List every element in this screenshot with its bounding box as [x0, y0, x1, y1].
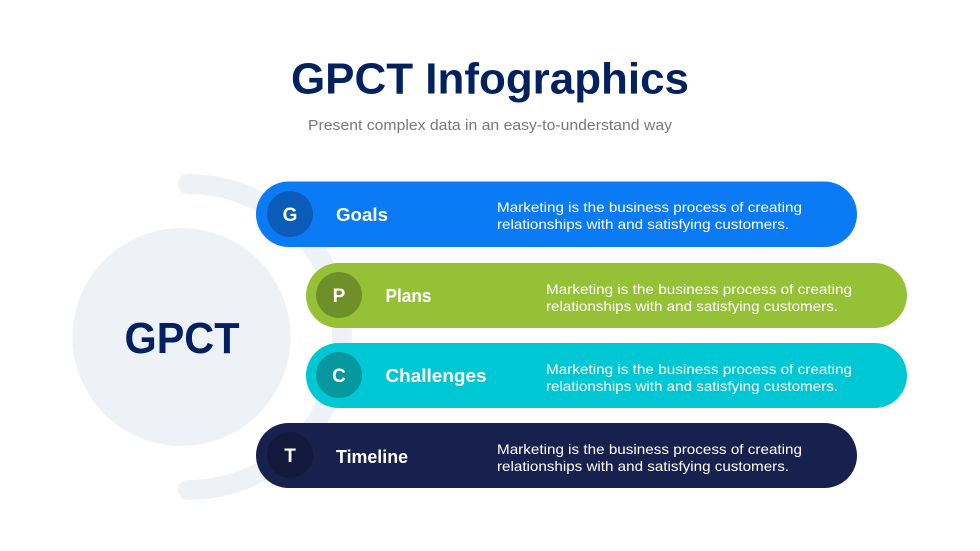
badge: G [267, 191, 313, 237]
description: Challenges: Marketing is the business process of creating [546, 361, 852, 377]
bar: Plans [306, 263, 907, 328]
description: Challenges: relationships with and satisfying customers. [546, 378, 838, 394]
badge: T: T [284, 446, 296, 467]
description: Goals: Marketing is the business process of creating [497, 199, 802, 215]
badge: T [267, 432, 313, 478]
label: Challenges: Challenges [386, 366, 486, 386]
badge: G: G [283, 205, 297, 226]
bar: Timeline [256, 423, 857, 488]
badge: P: P [333, 286, 346, 307]
central circle [72, 228, 290, 446]
badge: C [316, 352, 362, 398]
bar: Goals [256, 182, 857, 247]
description: Plans: relationships with and satisfying customers. [546, 298, 838, 314]
label: Timeline: Timeline [336, 447, 408, 467]
description: Timeline: relationships with and satisfying customers. [497, 458, 789, 474]
label: Goals: Goals [336, 205, 388, 225]
bar: Challenges [306, 343, 907, 408]
description: Plans: Marketing is the business process of creating [546, 281, 852, 297]
subtitle: Present complex data in an easy-to-understand way [308, 117, 673, 134]
central label: GPCT [124, 314, 240, 363]
title: GPCT Infographics [291, 54, 689, 104]
description: Timeline: Marketing is the business process of creating [497, 441, 802, 457]
label: Plans: Plans [386, 286, 432, 306]
badge: P [316, 272, 362, 318]
description: Goals: relationships with and satisfying customers. [497, 216, 789, 232]
decorative arc behind bars [188, 184, 342, 490]
badge: C: C [332, 366, 346, 387]
